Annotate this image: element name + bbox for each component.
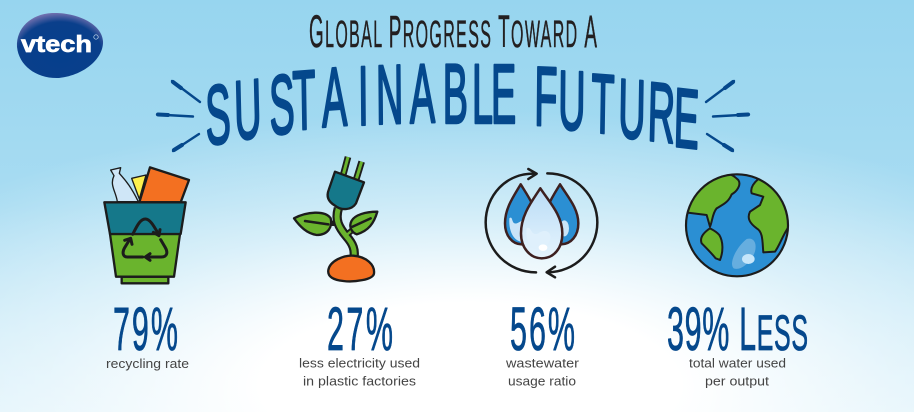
orange card — [139, 167, 189, 202]
stat: total water: 39% LESS — [667, 296, 808, 364]
left drop — [505, 184, 537, 244]
icon: globe — [685, 173, 792, 276]
stat: recycling rate: 79% — [113, 296, 178, 364]
stat: total water: per output — [705, 374, 770, 388]
stat: total water: total water used — [689, 356, 786, 370]
icon: recycling bin — [104, 167, 189, 283]
right leaf — [350, 212, 377, 234]
stat: less electricity: 27% — [327, 296, 393, 364]
highlight — [732, 239, 756, 269]
right drop — [544, 184, 578, 244]
stat: wastewater: wastewater — [505, 356, 579, 370]
bin body — [110, 234, 180, 277]
bin band — [104, 202, 186, 234]
soil mound — [328, 256, 374, 281]
stat: wastewater: 56% — [510, 296, 575, 364]
icon: plant with plug — [294, 157, 377, 281]
stat: wastewater: usage ratio — [508, 374, 576, 388]
stem — [330, 208, 355, 257]
stat: wastewater — [505, 296, 579, 388]
rays: right — [706, 81, 749, 151]
left leaf — [294, 213, 331, 235]
bottle — [111, 168, 138, 202]
yellow paper — [132, 175, 146, 199]
bin base — [122, 277, 168, 283]
stat: less electricity: less electricity used — [299, 356, 420, 370]
logo: vtech — [17, 13, 103, 78]
title: first line: GLOBAL PROGRESS TOWARD A — [309, 8, 597, 57]
stat: less electricity — [299, 296, 420, 388]
recycling symbol — [123, 219, 167, 260]
rays: left — [157, 81, 200, 151]
stat: recycling rate: recycling rate — [106, 357, 189, 371]
cycle arrows — [486, 169, 597, 277]
title: second line: SUSTAINABLE FUTURE — [204, 46, 700, 167]
stat: less electricity: in plastic factories — [303, 374, 416, 388]
centre drop — [521, 188, 562, 258]
continents — [685, 173, 792, 260]
logo: vtech: vtech — [21, 31, 92, 57]
plug — [328, 172, 364, 209]
icon: water drops with cycle arrows — [486, 169, 597, 277]
prongs — [343, 157, 362, 179]
